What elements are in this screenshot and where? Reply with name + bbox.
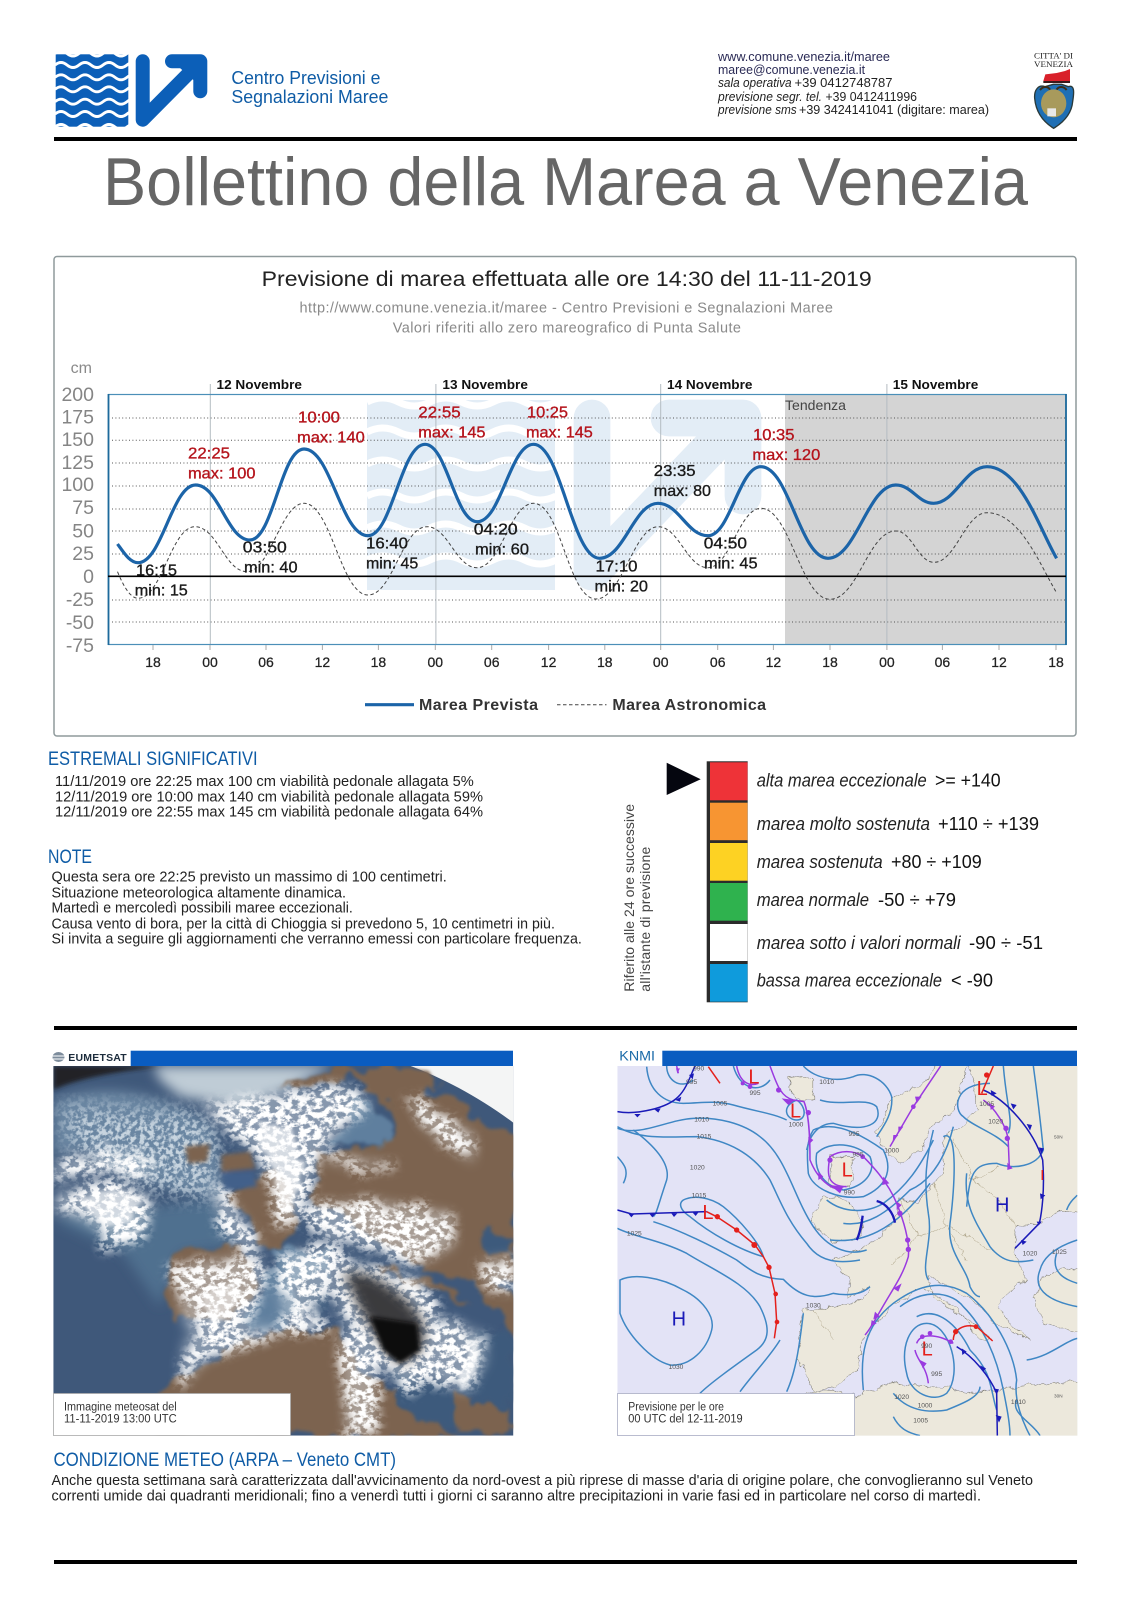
scale labels: -50 ÷ +79 [878, 890, 956, 910]
text block: notes: Causa vento di bora, per la città di Chioggia si prevedono 5, 10 centimetri in più. [52, 916, 555, 932]
extreme labels: minima and low maxima: min: 60 [475, 542, 529, 559]
crest: Città di Venezia [1034, 50, 1074, 128]
x axis labels: 00 [202, 654, 218, 670]
date labels [216, 377, 978, 392]
x axis labels: 12 [541, 654, 557, 670]
y axis labels: 200 [61, 384, 94, 406]
bottom rule [54, 1560, 1077, 1564]
rotated reference note: all'istante di previsione [637, 846, 653, 992]
isobar labels: 1005 [979, 1101, 994, 1108]
isobar labels: 1000 [884, 1148, 899, 1155]
text block: notes: Questa sera ore 22:25 previsto un massimo di 100 centimetri. [52, 870, 447, 886]
extreme labels: high maxima [188, 405, 820, 482]
small vortex [300, 1307, 316, 1327]
text block: notes: Si invita a seguire gli aggiornamenti che verranno emessi con particolare frequenza. [52, 932, 582, 948]
extreme labels: high maxima: 10:25 [527, 405, 568, 422]
isobar labels: 1030 [806, 1302, 821, 1309]
y axis labels: -75 [66, 635, 94, 657]
contact details: www.comune.venezia.it/maree [717, 49, 890, 64]
extreme labels: minima and low maxima: max: 80 [654, 483, 711, 500]
rotated reference note: Riferito alle 24 ore successive [621, 804, 637, 992]
middle rule [54, 1026, 1077, 1030]
pressure centres: L [977, 1078, 988, 1100]
text block: extremes list: 12/11/2019 ore 10:00 max 140 cm viabilità pedonale allagata 59% [55, 789, 483, 805]
icon: arrow [143, 61, 200, 120]
pressure centres: H [672, 1309, 686, 1331]
extreme labels: minima and low maxima: 23:35 [654, 463, 696, 480]
extreme labels: high maxima: max: 100 [188, 465, 256, 482]
date labels: 13 Novembre [442, 377, 528, 392]
isobar labels: 1030 [669, 1364, 684, 1371]
occluded front markers [676, 1068, 1013, 1368]
isobar labels: 985 [852, 1152, 864, 1159]
x axis labels: 18 [371, 654, 386, 670]
isobar labels: 1020 [690, 1164, 705, 1171]
extreme labels: minima and low maxima: 16:40 [366, 535, 408, 552]
x axis labels: 00 [879, 654, 895, 670]
extreme labels: minima and low maxima: 03:50 [243, 540, 287, 557]
extreme labels: minima and low maxima: min: 45 [704, 555, 758, 572]
extreme labels: high maxima: 22:55 [418, 405, 461, 422]
x axis labels: 18 [822, 654, 838, 670]
extreme labels: high maxima: max: 140 [297, 429, 365, 446]
extreme labels: minima and low maxima: 16:15 [136, 562, 177, 579]
text block: extremes list: 11/11/2019 ore 22:25 max 100 cm viabilità pedonale allagata 5% [55, 774, 474, 790]
white cloud masses [53, 1083, 513, 1433]
heading: note: NOTE [48, 846, 92, 868]
x axis labels [145, 654, 1064, 670]
scale labels: -90 ÷ -51 [969, 933, 1043, 953]
satellite caption: 11-11-2019 13:00 UTC [64, 1414, 177, 1426]
isobar labels: 30N [1054, 1393, 1063, 1398]
crest: Città di Venezia: CITTA' DI [1034, 50, 1073, 60]
soft cloud veil [53, 1083, 513, 1433]
extreme labels: high maxima: 10:35 [753, 427, 795, 444]
text block: weather conditions: correnti umide dai quadranti meridionali; fino a venerdì tutti i giorni ci saranno altre precipitazioni in varie fasi ed in particolare nel corso di martedì. [52, 1489, 981, 1505]
extreme labels: minima and low maxima: min: 45 [366, 555, 418, 572]
scale labels: marea molto sostenuta [757, 814, 930, 834]
y axis labels: -50 [66, 612, 94, 634]
scale labels [757, 771, 1043, 991]
y axis labels: 25 [72, 543, 94, 565]
scale bar [707, 761, 748, 1002]
extreme labels: high maxima: max: 145 [526, 424, 593, 441]
x axis labels: 00 [428, 654, 443, 670]
extreme labels: minima and low maxima [135, 463, 758, 600]
scale labels: bassa marea eccezionale [757, 971, 942, 991]
astronomical tide dashed line [118, 503, 1056, 599]
x axis labels: 12 [766, 654, 781, 670]
dark sea patches [293, 1230, 513, 1427]
y axis labels: 0 [83, 566, 94, 588]
country borders [813, 1140, 1017, 1340]
isobar labels: 1020 [894, 1394, 909, 1401]
scale labels: marea sotto i valori normali [757, 933, 962, 953]
extreme labels: minima and low maxima: 04:20 [474, 522, 518, 539]
extreme labels: minima and low maxima: 04:50 [704, 535, 747, 552]
header rule [54, 137, 1077, 141]
isobar labels: 1015 [697, 1134, 712, 1141]
x axis labels: 18 [597, 654, 613, 670]
date labels: 14 Novembre [667, 377, 752, 392]
isobar labels: 1025 [627, 1231, 642, 1238]
pressure centres: L [790, 1100, 801, 1122]
isobar labels: 1010 [819, 1079, 834, 1086]
isobar labels: 995 [749, 1090, 761, 1097]
satellite picture [53, 1063, 517, 1436]
isobar labels: 990 [693, 1066, 705, 1073]
y axis labels: 150 [61, 429, 94, 451]
x axis labels: 06 [710, 654, 726, 670]
x axis labels: 00 [653, 654, 669, 670]
x ticks [153, 645, 1056, 650]
day separators [210, 384, 887, 644]
isobar labels: 1015 [692, 1192, 707, 1199]
heading: estremali significativi: ESTREMALI SIGNIFICATIVI [48, 748, 258, 770]
current level arrow [667, 763, 701, 795]
pressure centres: L [922, 1339, 933, 1361]
isobar labels: 995 [848, 1131, 860, 1138]
chart source lines: http://www.comune.venezia.it/maree - Centro Previsioni e Segnalazioni Maree [300, 300, 833, 316]
extreme labels: high maxima: 10:00 [298, 410, 340, 427]
land masses [157, 1068, 517, 1436]
contact details [717, 49, 989, 117]
y axis labels: 175 [61, 406, 94, 428]
scale labels: >= +140 [935, 771, 1001, 791]
y axis labels: 100 [61, 474, 94, 496]
y axis labels: 50 [72, 520, 94, 542]
y axis labels [61, 360, 94, 657]
satellite caption [54, 1394, 290, 1436]
header logo: waves and arrow [55, 51, 200, 130]
dark storm core over Sardinia and Italy [343, 1272, 425, 1363]
isobar labels: 995 [931, 1371, 943, 1378]
text block: weather conditions: Anche questa settimana sarà caratterizzata dall'avvicinamento da nord-ovest a più riprese di masse d'aria di origine polare, che convoglieranno sul Veneto [52, 1473, 1033, 1489]
x axis labels: 12 [315, 654, 330, 670]
extreme labels: high maxima: max: 120 [752, 447, 820, 464]
knmi header: KNMI [619, 1048, 655, 1064]
x axis labels: 06 [935, 654, 950, 670]
weather map [617, 1060, 1083, 1440]
contact details: +39 0412411996 [826, 89, 917, 104]
isobar labels: 995 [686, 1079, 698, 1086]
icon: waves [55, 51, 139, 130]
isobars [617, 1066, 1077, 1436]
isobar labels: 50N [1054, 1134, 1063, 1139]
extreme labels: minima and low maxima: min: 40 [244, 560, 298, 577]
eumetsat header: EUMETSAT [68, 1052, 127, 1064]
scale labels: < -90 [951, 971, 993, 991]
text block: notes: Situazione meteorologica altamente dinamica. [52, 885, 346, 901]
eumetsat header [52, 1051, 513, 1066]
contact details: previsione sms [717, 102, 797, 117]
pressure centres: L [702, 1202, 713, 1224]
isobar labels: 1005 [913, 1417, 928, 1424]
isobar labels: 1010 [694, 1116, 709, 1123]
light blue sea and baltic [247, 1093, 393, 1330]
text block: notes: Martedì e mercoledì possibili maree eccezionali. [52, 901, 353, 917]
isobar labels: 1020 [988, 1118, 1003, 1125]
satellite caption: Immagine meteosat del [64, 1402, 177, 1414]
isobar labels: 1000 [789, 1122, 804, 1129]
extreme labels: minima and low maxima: min: 20 [594, 579, 648, 596]
chart legend [365, 697, 766, 714]
isobar labels: 990 [844, 1190, 855, 1197]
isobar labels: 1010 [1011, 1399, 1026, 1406]
watermark logo [367, 398, 743, 590]
rotated reference note [621, 804, 653, 992]
extreme labels: minima and low maxima: min: 15 [135, 583, 188, 600]
chart source lines: Valori riferiti allo zero mareografico di Punta Salute [393, 320, 741, 336]
occluded fronts [677, 1066, 1009, 1383]
isobar labels [627, 1066, 1067, 1424]
x axis labels: 06 [484, 654, 500, 670]
x axis labels: 06 [258, 654, 274, 670]
pressure centres: L [842, 1160, 853, 1182]
x axis labels: 12 [991, 654, 1007, 670]
forecast tide line [118, 444, 1057, 563]
panel: surface pressure map [617, 1048, 1083, 1440]
solid white cloud cores [73, 1120, 483, 1393]
scale labels: alta marea eccezionale [757, 771, 927, 791]
chart legend: Marea Prevista [419, 697, 538, 714]
heading: condizione meteo: CONDIZIONE METEO (ARPA – Veneto CMT) [54, 1449, 396, 1471]
polar sky and limb [410, 1066, 514, 1123]
map caption: 00 UTC del 12-11-2019 [628, 1414, 743, 1426]
title: Bollettino della Marea a Venezia [103, 144, 1028, 220]
isobar labels: 1005 [713, 1101, 728, 1108]
panel: satellite image [52, 1051, 517, 1436]
pressure centres [672, 1066, 1009, 1361]
extreme labels: minima and low maxima: 17:10 [596, 559, 638, 576]
isobar labels: 1000 [918, 1403, 933, 1410]
plot frame [108, 394, 1066, 645]
contact details: previsione segr. tel. [717, 89, 822, 104]
contact details: maree@comune.venezia.it [718, 62, 865, 77]
extreme labels: high maxima: max: 145 [418, 424, 486, 441]
chart legend: Marea Astronomica [612, 697, 766, 714]
cold front markers [628, 1073, 1045, 1423]
tendenza label: Tendenza [785, 397, 846, 413]
scale labels: marea normale [757, 890, 869, 910]
date labels: 12 Novembre [216, 377, 302, 392]
pressure centres: H [995, 1194, 1009, 1216]
y axis labels: cm [71, 360, 92, 377]
warm front markers [715, 1072, 989, 1334]
isobar labels: 990 [921, 1343, 933, 1350]
text block: weather conditions [52, 1473, 1033, 1505]
british isles [185, 1144, 257, 1190]
extreme labels: high maxima: 22:25 [188, 445, 230, 462]
organisation name [231, 67, 388, 107]
y axis labels: 75 [72, 497, 94, 519]
warm fronts [707, 1066, 1042, 1341]
scale labels: marea sostenuta [757, 852, 883, 872]
crest: Città di Venezia: VENEZIA [1034, 59, 1074, 69]
chart source lines [300, 300, 833, 336]
grid lines [112, 418, 1066, 622]
x axis labels: 18 [145, 654, 161, 670]
date labels: 15 Novembre [893, 377, 978, 392]
panel: tide forecast chart [54, 256, 1076, 736]
scale labels: +110 ÷ +139 [938, 814, 1039, 834]
map caption [618, 1394, 854, 1436]
contact details: sala operativa [718, 75, 792, 90]
land [788, 1066, 1078, 1436]
contact details: +39 3424141041 (digitare: marea) [799, 102, 989, 117]
x axis labels: 18 [1048, 654, 1064, 670]
organisation name: Centro Previsioni e [231, 67, 380, 88]
organisation name: Segnalazioni Maree [231, 86, 388, 107]
isobar labels: 1020 [1023, 1251, 1038, 1258]
cold fronts [617, 1066, 1043, 1436]
zero line [108, 575, 1066, 577]
y axis labels: -25 [66, 589, 94, 611]
knmi header [619, 1048, 1077, 1066]
trend shaded area [785, 395, 1066, 644]
atlantic mottled cloud [60, 1107, 220, 1200]
text block: extremes list [55, 774, 483, 821]
scale labels: +80 ÷ +109 [891, 852, 982, 872]
map caption: Previsione per le ore [628, 1402, 724, 1414]
text block: notes [52, 870, 582, 948]
text block: extremes list: 12/11/2019 ore 22:55 max 145 cm viabilità pedonale allagata 64% [55, 805, 483, 821]
pressure centres: L [748, 1066, 759, 1088]
isobar labels: 1025 [1052, 1249, 1067, 1256]
chart heading: Previsione di marea effettuata alle ore 14:30 del 11-11-2019 [262, 268, 872, 291]
y axis labels: 125 [61, 452, 94, 474]
contact details: +39 0412748787 [794, 75, 892, 90]
